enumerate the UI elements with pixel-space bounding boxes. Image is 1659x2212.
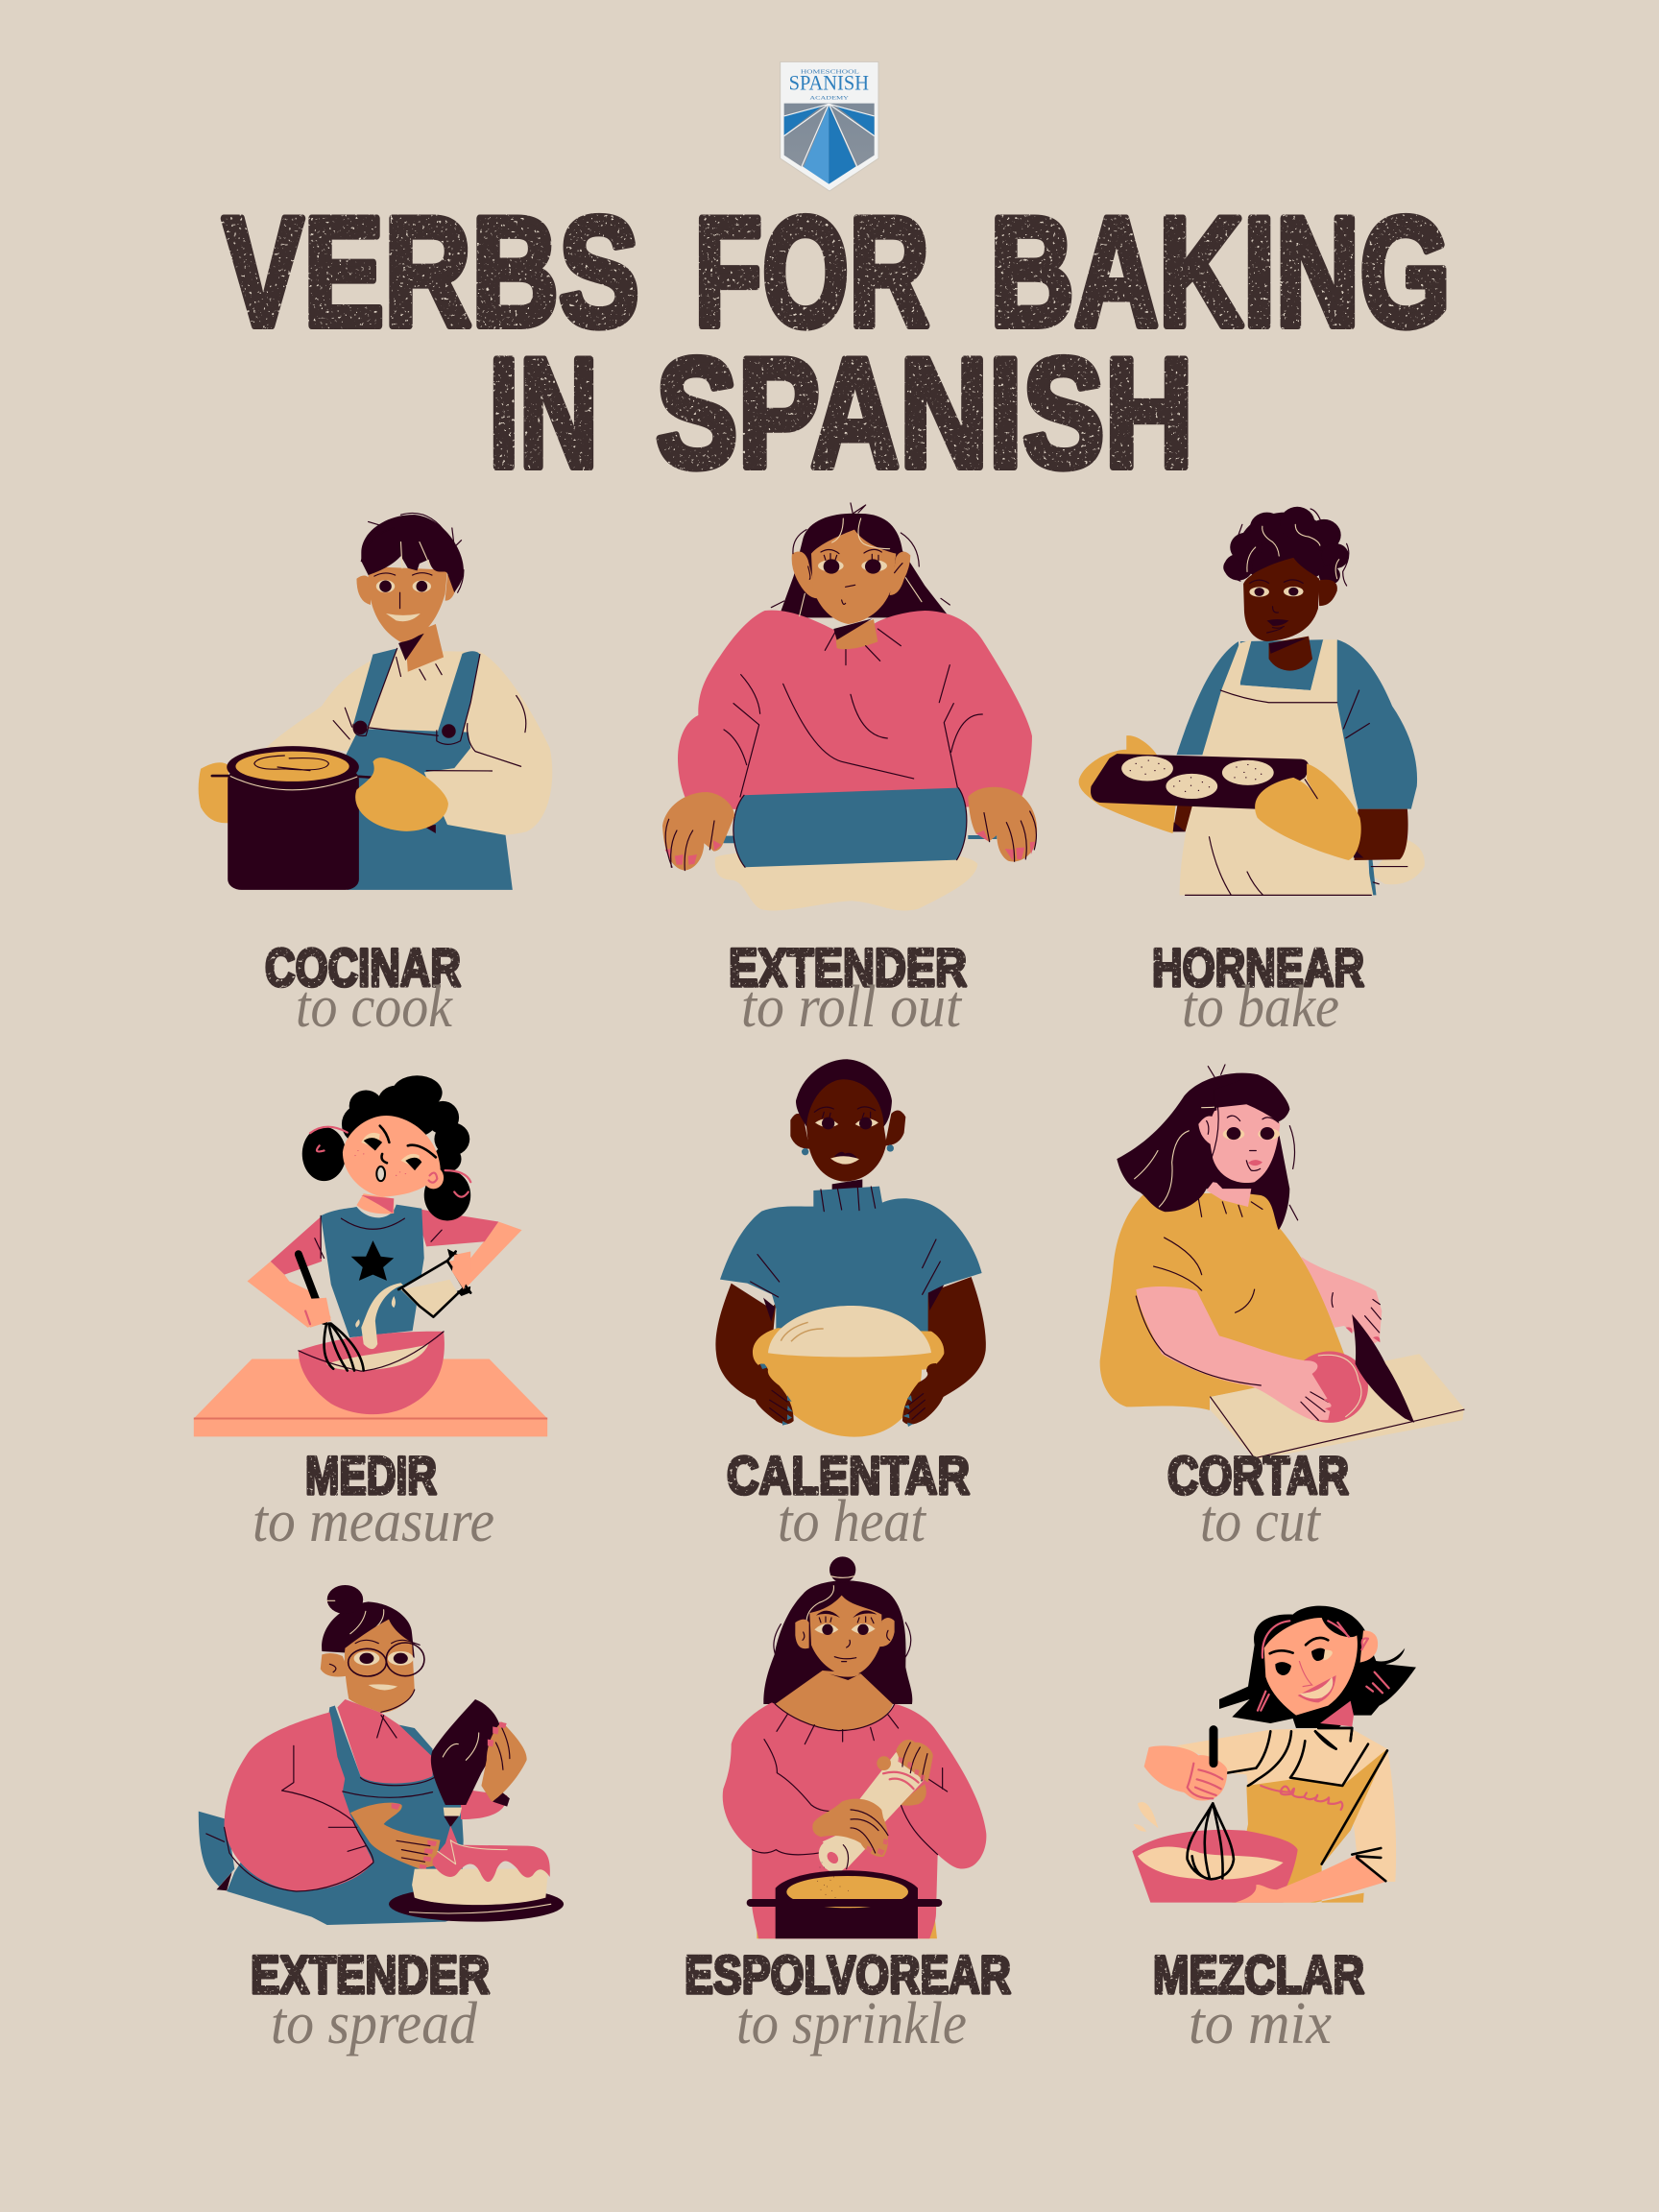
- hands: [756, 1363, 944, 1425]
- illustration: girl measuring and whisking: [194, 1075, 547, 1436]
- bowl: [753, 1328, 944, 1437]
- panel: medir: [194, 1075, 547, 1554]
- translation: to cook: [296, 974, 453, 1040]
- logo: Homeschool Spanish Academy shield: HOMESCHOOL: [801, 68, 859, 75]
- left mitt: [1079, 735, 1176, 833]
- fruit: [1291, 1352, 1368, 1423]
- left oven mitt: [199, 762, 228, 823]
- verb label: ESPOLVOREAR: [685, 1944, 1011, 2005]
- piping bag: [431, 1699, 510, 1827]
- title: [223, 185, 1451, 500]
- illustration: woman with rolling pin: [662, 503, 1037, 910]
- translation: to spread: [271, 1991, 478, 2056]
- left hand: [662, 792, 734, 871]
- cutting board: [1211, 1354, 1464, 1459]
- hair: [1117, 1073, 1289, 1230]
- title: SPANISH: [656, 326, 1193, 500]
- illustration: baker with tray of cookies: [1079, 507, 1425, 895]
- illustration: woman icing a cake: [199, 1585, 564, 1925]
- verb label: MEZCLAR: [1153, 1944, 1364, 2005]
- rolling pin: [723, 788, 997, 867]
- left hand and whisk handle: [1144, 1730, 1227, 1801]
- translation: to heat: [778, 1489, 927, 1554]
- title: BAKING: [990, 185, 1451, 359]
- tray with cookies: [1091, 754, 1309, 809]
- pot: [751, 1863, 938, 1938]
- panel: hornear: [1079, 507, 1425, 1040]
- short hair: [796, 1059, 892, 1126]
- panel: espolvorear: [685, 1556, 1011, 2056]
- whisk: [299, 1254, 331, 1328]
- illustration: cook holding a pot: [199, 513, 552, 890]
- knife: [1352, 1314, 1414, 1423]
- illustration: woman sprinkling over a pot: [723, 1556, 986, 1938]
- splashes: [1134, 1802, 1158, 1832]
- verb label: HORNEAR: [1152, 937, 1364, 998]
- hair: [1219, 1606, 1416, 1728]
- logo: Homeschool Spanish Academy shield: ACADEMY: [809, 96, 849, 102]
- verb label: MEDIR: [305, 1445, 437, 1505]
- upper hand: [877, 1740, 933, 1806]
- title: VERBS: [223, 185, 639, 359]
- illustration: person holding dough in a bowl: [715, 1059, 986, 1437]
- cake: [389, 1826, 564, 1922]
- translation: to bake: [1182, 974, 1339, 1040]
- head: [322, 1601, 415, 1658]
- right oven mitt: [355, 757, 448, 831]
- translation: to mix: [1189, 1991, 1332, 2056]
- dough: [768, 1306, 931, 1358]
- hair: [302, 1075, 470, 1220]
- bowl: [1132, 1830, 1298, 1903]
- apron strap: [329, 1706, 361, 1779]
- translation: to sprinkle: [736, 1991, 967, 2056]
- illustration: woman cutting fruit on a board: [1100, 1065, 1464, 1459]
- title: FOR: [694, 185, 929, 359]
- panel: calentar: [715, 1059, 986, 1554]
- translation: to cut: [1200, 1489, 1322, 1554]
- panel: mezclar: [1132, 1606, 1416, 2056]
- panel: cocinar: [199, 513, 552, 1040]
- verb label: EXTENDER: [251, 1944, 490, 2005]
- verb label: EXTENDER: [729, 937, 967, 998]
- panel: cortar: [1100, 1065, 1464, 1554]
- star: [351, 1240, 394, 1281]
- pot: [212, 746, 393, 890]
- panel: extender (roll out): [662, 503, 1037, 1040]
- right forearm: [1236, 1855, 1385, 1903]
- verb label: COCINAR: [265, 937, 461, 998]
- hand holding bag: [481, 1721, 527, 1802]
- lower hand: [812, 1799, 888, 1857]
- near arm: [1136, 1286, 1332, 1420]
- verb label: CALENTAR: [727, 1445, 970, 1505]
- table: [194, 1358, 547, 1436]
- panel: extender (spread): [199, 1585, 564, 2056]
- arms: [447, 1222, 522, 1287]
- measuring cup: [398, 1249, 470, 1317]
- sweater: [723, 1702, 986, 1938]
- right hand: [968, 787, 1037, 861]
- pink top: [337, 1699, 433, 1783]
- logo: Homeschool Spanish Academy shield: [781, 61, 878, 191]
- translation: to roll out: [741, 974, 963, 1040]
- title: IN: [489, 326, 598, 500]
- front hand: [350, 1803, 441, 1869]
- shaker: [813, 1752, 924, 1878]
- right mitt: [1255, 763, 1361, 860]
- curly hair: [1224, 507, 1349, 586]
- pink sleeve: [225, 1712, 373, 1891]
- illustration: woman whisking in a bowl: [1132, 1606, 1416, 1903]
- verb label: CORTAR: [1167, 1445, 1349, 1505]
- translation: to measure: [252, 1489, 494, 1554]
- bowl and batter: [299, 1332, 445, 1414]
- whisk: [1188, 1803, 1234, 1879]
- logo: Homeschool Spanish Academy shield: SPANISH: [789, 71, 869, 95]
